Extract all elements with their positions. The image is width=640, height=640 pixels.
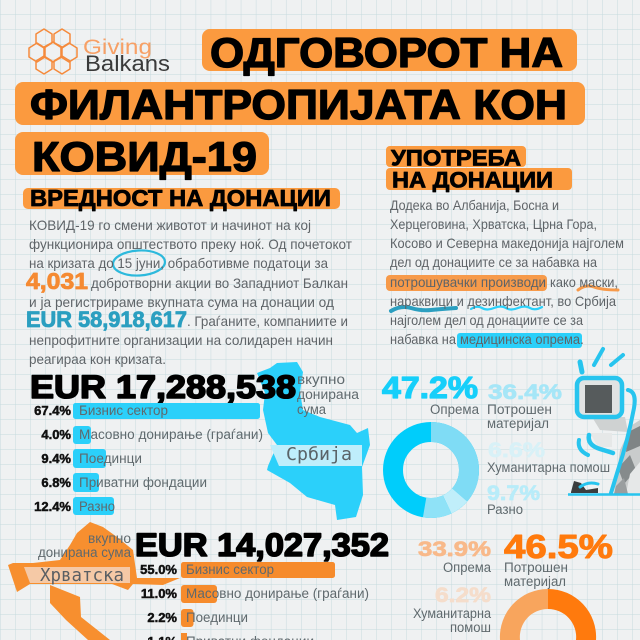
caption: Serbia total donated: сума [297,402,326,417]
map: Croatia: Хрватска [40,565,124,586]
text block: usage: потрошувачки производи [390,274,546,290]
text block: usage: Херцеговина, Хрватска, Црна Гора, [390,216,597,232]
squiggle: gloves [391,307,456,311]
stats: Croatia usage: Опрема [443,560,491,575]
stats: Serbia usage: Разно [487,502,523,517]
percentages: 9.4% [41,451,71,466]
categories: Разно [79,499,115,514]
categories [186,562,369,640]
text block: intro: и ја регистрираме вкупната сума на донации од [29,294,334,310]
categories [79,403,263,514]
photo: machine body [592,417,628,432]
stats: Serbia usage: 47.2% [382,370,478,405]
percentages: 11.0% [141,586,177,601]
chart: Serbia donations by source [30,369,296,515]
categories: Приватни фондации [79,475,207,490]
title line 2: ФИЛАНТРОПИЈАТА КОН [30,81,567,128]
text block: usage: дел од донациите се за набавка на [390,254,597,270]
text block: intro [26,217,353,367]
heading: use of donations: НА ДОНАЦИИ [392,168,553,192]
stats: Serbia usage: 36.4% [488,381,562,404]
stats: Serbia usage: материјал [487,416,549,431]
photo: equipment cluster [614,420,640,494]
stats: Serbia usage: Потрошен [487,402,552,417]
stats: Serbia usage: 9.7% [487,482,540,505]
stats: Croatia usage: помош [450,620,491,635]
text block: usage: Додека во Албанија, Босна и [390,197,559,213]
map: Serbia [257,362,370,520]
percentages: 2.2% [147,610,177,625]
text block: usage: набавка на [390,331,456,347]
title line 1: ОДГОВОРОТ НА [210,29,563,76]
logo: Giving Balkans: Giving [83,36,152,59]
percentages [34,403,71,514]
stats: Serbia usage: Опрема [430,402,479,417]
categories: Бизнис сектор [186,562,274,577]
stats: Serbia usage [382,370,610,517]
stats: Croatia usage: материјал [504,574,566,589]
text block: intro: КОВИД-19 го смени животот и начинот на кој [29,217,311,233]
bars [73,403,260,515]
caption: Serbia total donated [297,372,359,417]
highlight: medical equipment [457,333,582,348]
logo: Giving Balkans [29,29,170,76]
logo: Giving Balkans: Balkans [85,51,170,76]
categories: Масовно донирање (граѓани) [79,427,263,442]
squiggle: disinfectant [471,306,542,310]
stats: Croatia usage: Потрошен [504,560,568,575]
stats: Serbia usage: Хуманитарна помош [487,460,610,475]
text block: intro: непрофитните организации на солидарен начин [29,332,333,348]
title line 3: КОВИД-19 [32,133,257,180]
stats: Croatia usage: 46.5% [504,528,613,565]
percentages [140,562,177,640]
highlight: circled date [112,249,166,277]
stats: Serbia usage: 6.6% [488,439,545,462]
percentages: 67.4% [34,403,71,418]
caption: Serbia total donated: донирана [297,387,359,402]
text block: usage: нараквици и дезинфектант, во Србија [390,293,616,309]
map: Croatia [8,522,180,640]
total: Serbia: EUR 17,288,538 [30,369,296,405]
caption: Croatia total donated: донирана сума [38,545,131,560]
text block: intro: 4,031 [26,268,88,294]
heading: use of donations: УПОТРЕБА [391,146,521,170]
frame [577,349,635,493]
text block: intro: на кризата до 15 јуни, обработивме податоци за [29,255,328,271]
highlight: consumer products [386,275,547,291]
caption: Croatia total donated [38,531,131,560]
stats: Croatia usage [413,528,613,635]
map label band: Croatia [24,567,130,583]
photo: monitor [578,378,622,416]
heading: value of donations: ВРЕДНОСТ НА ДОНАЦИИ [30,185,331,211]
heading: use of donations [386,146,572,192]
donut chart: Serbia usage [393,432,469,508]
text block: intro: EUR 58,918,617 [26,307,187,332]
categories: Бизнис сектор [79,403,168,418]
map label band: Serbia [270,445,362,466]
donut chart: Croatia usage [500,589,596,640]
stats: Croatia usage: 33.9% [418,538,491,561]
text block: usage: медицинска опрема [460,331,580,347]
text block: intro: . Граѓаните, компаниите и [187,313,348,329]
text block: usage [386,197,624,348]
text block: usage: . [580,331,584,347]
percentages: 6.8% [41,475,71,490]
stats: Croatia usage: 6.2% [435,584,491,607]
text block: usage: најголем дел од донациите се за [390,312,583,328]
caption: Croatia total donated: вкупно [88,531,131,546]
squiggle: masks [578,286,618,290]
text block: usage: како маски, [550,274,618,290]
percentages: 4.0% [41,427,71,442]
text block: intro: функционира општеството преку ноќ. Од почетокот [29,236,353,252]
text block: intro: реагираа кон кризата. [29,351,166,367]
map: Serbia: Србија [286,444,352,465]
icon: medical monitor illustration [568,349,640,494]
caption: Serbia total donated: вкупно [297,372,345,387]
base [571,481,598,493]
text block: usage: Косово и Северна македонија најголем [390,235,624,251]
percentages: 55.0% [140,562,177,577]
categories: Поединци [79,451,142,466]
stats: Croatia usage: Хуманитарна [413,606,491,621]
total: Croatia: EUR 14,027,352 [135,527,389,563]
chart: Croatia donations by source [135,527,389,640]
text block: intro: добротворни акции во Западниот Балкан [91,275,348,291]
categories: Поединци [186,610,248,625]
categories: Масовно донирање (граѓани) [186,586,369,601]
percentages: 12.4% [34,499,71,514]
bars [181,562,335,640]
